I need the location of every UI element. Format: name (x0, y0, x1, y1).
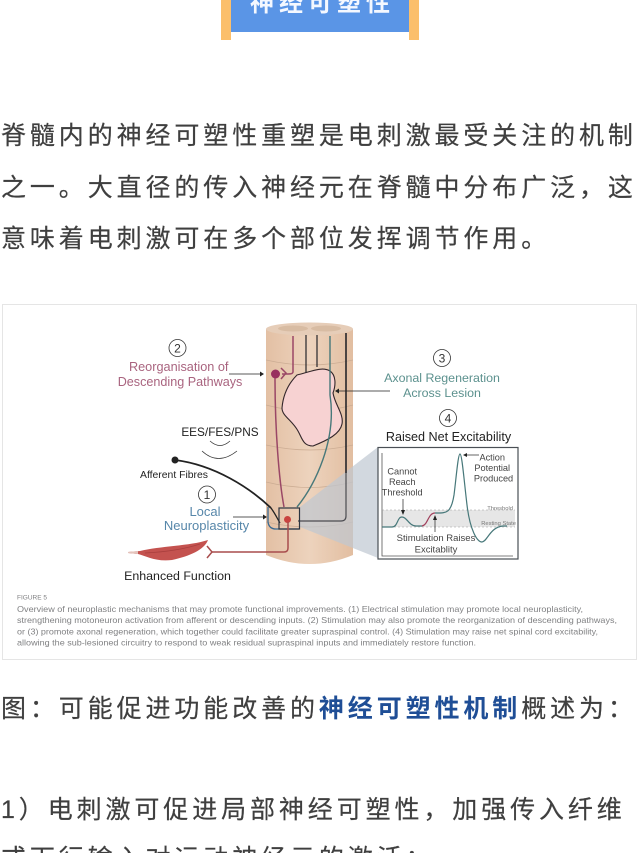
label 1: local neuroplasticity: 1 (204, 488, 211, 502)
banner blue plate (231, 0, 409, 32)
excitability chart: Cannot (387, 466, 417, 476)
list item 1: 1）电刺激可促进局部神经可塑性，加强传入纤维 (1, 796, 626, 824)
label: EES/FES/PNS: EES/FES/PNS (181, 425, 259, 439)
heading banner: 神经可塑性 (221, 0, 419, 40)
label 2: reorganisation: 2 (174, 342, 181, 356)
lesion (282, 369, 342, 446)
figure description line: 图：可能促进功能改善的神经可塑性机制概述为： (1, 695, 637, 723)
excitability chart: Threshold (487, 506, 513, 512)
label: EES/FES/PNS (181, 425, 259, 458)
label 3: axonal regeneration: Axonal Regeneration (384, 371, 500, 385)
label 2: reorganisation: Reorganisation of (129, 360, 229, 374)
spinal cord (266, 322, 353, 564)
excitability chart: Excitablity (415, 544, 458, 556)
intro paragraph: 意味着电刺激可在多个部位发挥调节作用。 (1, 225, 550, 253)
excitability chart: Reach (389, 477, 416, 487)
muscle (128, 540, 208, 560)
label 3: axonal regeneration: 3 (439, 352, 446, 366)
label: enhanced function: Enhanced Function (124, 569, 231, 583)
intro paragraph: 之一。大直径的传入神经元在脊髓中分布广泛，这 (1, 174, 637, 202)
label 4 and chart title (386, 410, 512, 444)
afferent fibre (172, 456, 299, 529)
intro paragraph: 脊髓内的神经可塑性重塑是电刺激最受关注的机制 (1, 122, 637, 150)
excitability chart: Stimulation Raises (397, 533, 476, 544)
label: afferent fibres: Afferent Fibres (140, 470, 208, 481)
black descending axons (298, 333, 346, 521)
excitability chart (378, 448, 518, 559)
excitability chart: Threshold (382, 488, 423, 498)
descending pathway (271, 336, 293, 507)
figure caption: strengthening motoneuron activation from afferent or descending inputs. (2) Stimulation may also promote the reorganization of descending pathways, (17, 616, 617, 625)
excitability chart: Produced (474, 474, 513, 484)
figure caption (17, 594, 617, 648)
projection wedge to excitability chart (300, 447, 378, 558)
figure caption: or (3) promote axonal regeneration, which together could facilitate greater supraspinal control. (4) Stimulation may raise net spinal cord excitability, (17, 628, 598, 636)
excitability chart: Action (479, 452, 505, 462)
label 2: reorganisation: Descending Pathways (118, 375, 242, 389)
intro paragraph (1, 122, 637, 253)
figure caption: Overview of neuroplastic mechanisms that may promote functional improvements. (1) Electrical stimulation may promote local neuroplasticity, (17, 605, 583, 614)
label 4 and chart title: 4 (445, 412, 452, 426)
figure caption: FIGURE 5 (17, 594, 47, 602)
figure caption: allowing the sub-lesioned circuitry to respond to weak residual supraspinal inputs and immediately restore function. (17, 638, 476, 648)
excitability chart: Potential (474, 463, 510, 473)
label 1: local neuroplasticity: Local (189, 504, 221, 519)
label 3: axonal regeneration (335, 350, 500, 400)
regenerating axon (297, 336, 331, 507)
neuron box (207, 508, 300, 558)
label 1: local neuroplasticity (164, 486, 267, 533)
label 1: local neuroplasticity: Neuroplasticity (164, 518, 250, 533)
list item 1 (1, 796, 626, 853)
label 2: reorganisation (118, 340, 264, 389)
excitability chart: Resting State (481, 521, 516, 527)
banner bottom gap (231, 32, 409, 40)
label 4 and chart title: Raised Net Excitability (386, 430, 512, 444)
label 3: axonal regeneration: Across Lesion (403, 386, 481, 400)
